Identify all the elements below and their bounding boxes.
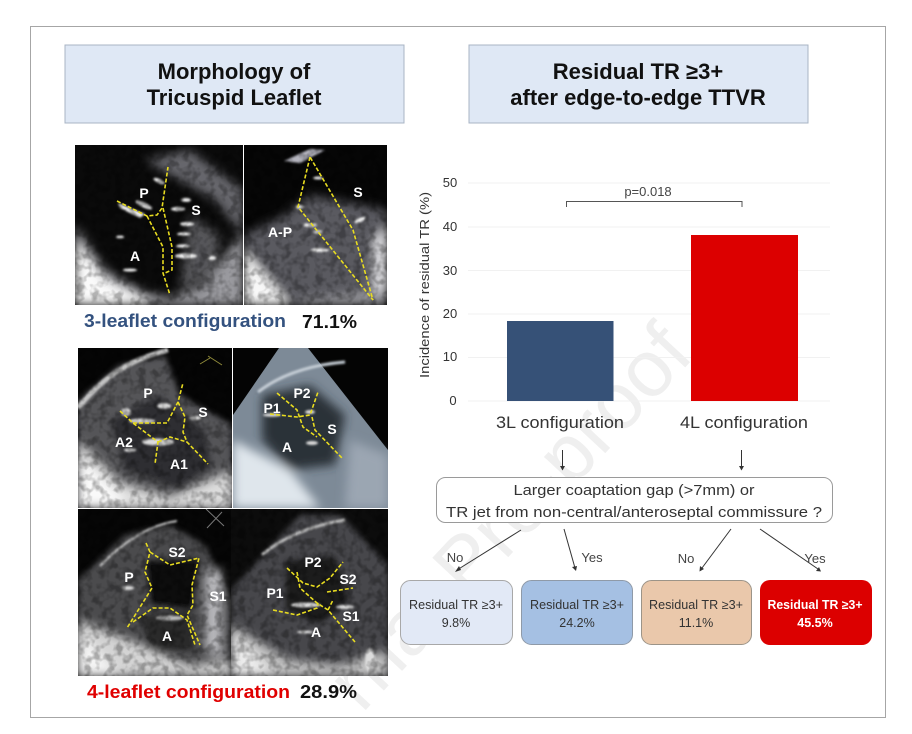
x axis labels: 4L configuration	[680, 413, 808, 432]
y axis ticks: 20	[443, 306, 457, 321]
labels: P1	[263, 400, 281, 416]
labels: P	[139, 185, 149, 201]
labels: S2	[339, 571, 357, 587]
labels	[124, 544, 227, 644]
question box: Larger coaptation gap (>7mm) or	[514, 482, 754, 499]
arrow: 3L down	[560, 450, 565, 470]
watermark: rnal Pre-proof	[309, 307, 709, 726]
labels: S	[327, 421, 337, 437]
outcome: 4L No	[642, 580, 752, 644]
y axis ticks: 50	[443, 175, 457, 190]
y axis title: Incidence of residual TR (%)	[417, 192, 432, 378]
labels	[268, 184, 363, 240]
labels	[115, 385, 208, 472]
labels: S	[198, 404, 208, 420]
branch labels: No	[447, 550, 463, 565]
y axis ticks: 10	[443, 349, 457, 364]
outcome: 4L Yes	[760, 580, 872, 645]
outcome: 3L No: Residual TR ≥3+	[409, 598, 503, 612]
y axis ticks: 30	[443, 263, 457, 278]
outcome: 4L No: 11.1%	[679, 616, 713, 630]
caption: 3-leaflet: 71.1%	[302, 312, 357, 332]
bar chart	[417, 175, 830, 432]
labels	[263, 385, 337, 455]
labels: S1	[342, 608, 360, 624]
labels: P	[143, 385, 153, 401]
labels: A	[311, 624, 321, 640]
labels: S1	[209, 588, 227, 604]
y axis ticks	[443, 175, 457, 408]
echo image: 3-leaflet view 2	[244, 145, 387, 305]
x axis labels	[496, 413, 808, 432]
outcome: 4L Yes: 45.5%	[797, 616, 833, 630]
outcome: 3L Yes	[522, 580, 632, 644]
labels: A-P	[268, 224, 292, 240]
outcome: 4L Yes: Residual TR ≥3+	[768, 598, 862, 612]
caption: 3-leaflet	[84, 311, 357, 332]
labels: A1	[170, 456, 188, 472]
labels	[266, 554, 360, 640]
labels: A2	[115, 434, 133, 450]
echo image: 4-leaflet view 1	[78, 348, 232, 508]
y axis ticks: 0	[449, 393, 457, 408]
heading: residual TR	[469, 45, 808, 123]
arrow: 4L down	[739, 450, 744, 470]
arrow: first No	[455, 530, 521, 572]
echo image: 4-leaflet view 3	[78, 509, 231, 676]
outcome: 3L Yes: 24.2%	[559, 616, 595, 630]
labels: A	[130, 248, 140, 264]
question box: TR jet from non-central/anteroseptal commissure ?	[446, 504, 822, 521]
branch labels: No	[678, 551, 694, 566]
x axis labels: 3L configuration	[496, 413, 624, 432]
heading: residual TR: Residual TR ≥3+	[553, 59, 723, 84]
caption: 4-leaflet	[87, 682, 357, 702]
arrow: second No	[700, 529, 731, 572]
labels: A	[282, 439, 292, 455]
outcome: 3L No: 9.8%	[442, 616, 470, 630]
echo image: 4-leaflet view 4	[231, 509, 388, 676]
labels: S2	[168, 544, 186, 560]
outcome: 3L No	[400, 580, 512, 644]
bar: 4L	[691, 235, 798, 401]
branch labels: Yes	[804, 551, 826, 566]
question box	[436, 478, 832, 522]
labels: A	[162, 628, 172, 644]
heading: residual TR: after edge-to-edge TTVR	[510, 85, 766, 110]
outcome: 4L No: Residual TR ≥3+	[649, 598, 743, 612]
echo image: 4-leaflet view 2	[233, 348, 388, 508]
heading: morphology: Tricuspid Leaflet	[147, 85, 322, 110]
labels: S	[353, 184, 363, 200]
labels: P2	[304, 554, 322, 570]
arrow: second Yes	[760, 529, 821, 572]
significance bracket	[566, 184, 742, 207]
heading: morphology: Morphology of	[158, 59, 311, 84]
outcome: 3L Yes: Residual TR ≥3+	[530, 598, 624, 612]
heading: morphology	[65, 45, 404, 123]
branch labels: Yes	[581, 550, 603, 565]
labels: P2	[293, 385, 311, 401]
y axis ticks: 40	[443, 219, 457, 234]
arrow: first Yes	[564, 529, 577, 571]
significance bracket: p=0.018	[624, 184, 672, 199]
labels: S	[191, 202, 201, 218]
echo image: 3-leaflet view 1	[75, 145, 243, 305]
caption: 3-leaflet: 3-leaflet configuration	[84, 311, 286, 331]
caption: 4-leaflet: 4-leaflet configuration	[87, 682, 290, 702]
labels	[130, 185, 201, 264]
labels: P	[124, 569, 134, 585]
labels: P1	[266, 585, 284, 601]
bar: 3L	[507, 321, 614, 401]
caption: 4-leaflet: 28.9%	[300, 682, 357, 702]
branch labels	[447, 550, 826, 566]
